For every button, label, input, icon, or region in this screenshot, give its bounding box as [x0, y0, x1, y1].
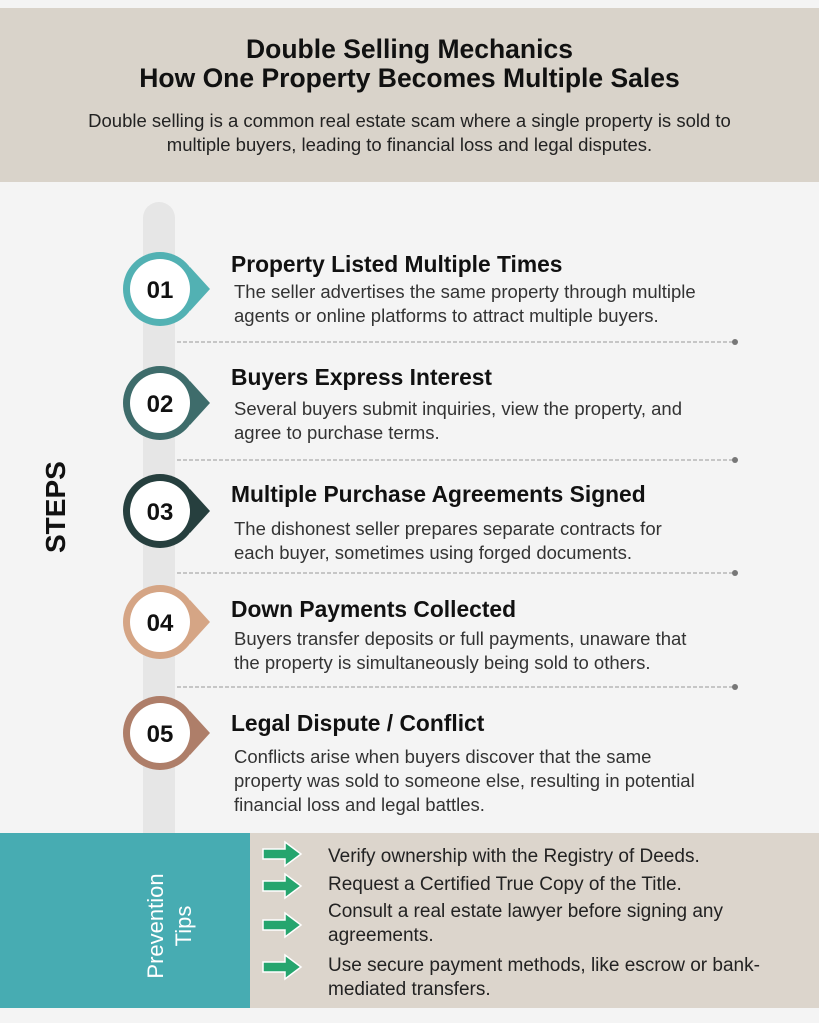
marker 05: 05: [147, 721, 173, 748]
prevention panel: Request a Certified True Copy of the Title.: [328, 874, 682, 895]
marker 03: [123, 474, 210, 548]
text: Buyers transfer deposits or full payments, unaware that: [234, 628, 686, 649]
marker 01: [123, 252, 210, 326]
text: property was sold to someone else, resulting in potential: [234, 770, 695, 791]
step 1 text: [231, 251, 696, 326]
text: the property is simultaneously being sold to others.: [234, 652, 650, 673]
text: agree to purchase terms.: [234, 422, 440, 443]
text: each buyer, sometimes using forged documents.: [234, 542, 632, 563]
prevention panel: Use secure payment methods, like escrow or bank-: [328, 955, 760, 976]
text: The dishonest seller prepares separate contracts for: [234, 518, 662, 539]
text: financial loss and legal battles.: [234, 794, 485, 815]
prevention label block: [0, 833, 250, 1008]
title: [139, 34, 680, 93]
marker 02: [123, 366, 210, 440]
prevention panel: [0, 833, 819, 1008]
step 5 text: [231, 710, 695, 815]
step 2 text: [231, 364, 682, 443]
text: Several buyers submit inquiries, view the property, and: [234, 398, 682, 419]
step 4 text: [231, 596, 686, 673]
subtitle: multiple buyers, leading to financial loss and legal disputes.: [167, 134, 652, 155]
marker 04: [123, 585, 210, 659]
tips list: [250, 833, 819, 1008]
marker 05: [123, 696, 210, 770]
marker 03: 03: [147, 499, 173, 526]
text: Legal Dispute / Conflict: [231, 710, 484, 736]
subtitle: [88, 110, 731, 155]
text: Property Listed Multiple Times: [231, 251, 562, 277]
timeline track: [143, 202, 175, 842]
marker 02: 02: [147, 391, 173, 418]
text: Conflicts arise when buyers discover that the same: [234, 746, 651, 767]
steps label: STEPS: [40, 461, 71, 553]
step 3 text: [231, 481, 662, 563]
marker 01: 01: [147, 277, 173, 304]
prevention label block: Tips: [171, 906, 196, 946]
marker 04: 04: [147, 610, 174, 637]
prevention label block: Prevention: [143, 873, 168, 979]
subtitle: Double selling is a common real estate scam where a single property is sold to: [88, 110, 731, 131]
prevention panel: agreements.: [328, 925, 434, 946]
text: Down Payments Collected: [231, 596, 516, 622]
text: agents or online platforms to attract multiple buyers.: [234, 305, 659, 326]
prevention panel: mediated transfers.: [328, 979, 491, 1000]
prevention panel: Verify ownership with the Registry of Deeds.: [328, 846, 700, 867]
text: The seller advertises the same property through multiple: [234, 281, 696, 302]
arrow icons: [263, 842, 301, 979]
title: Double Selling Mechanics: [246, 34, 573, 64]
text: Buyers Express Interest: [231, 364, 492, 390]
prevention panel: Consult a real estate lawyer before signing any: [328, 901, 723, 922]
header panel: [0, 8, 819, 182]
title: How One Property Becomes Multiple Sales: [139, 63, 680, 93]
text: Multiple Purchase Agreements Signed: [231, 481, 646, 507]
